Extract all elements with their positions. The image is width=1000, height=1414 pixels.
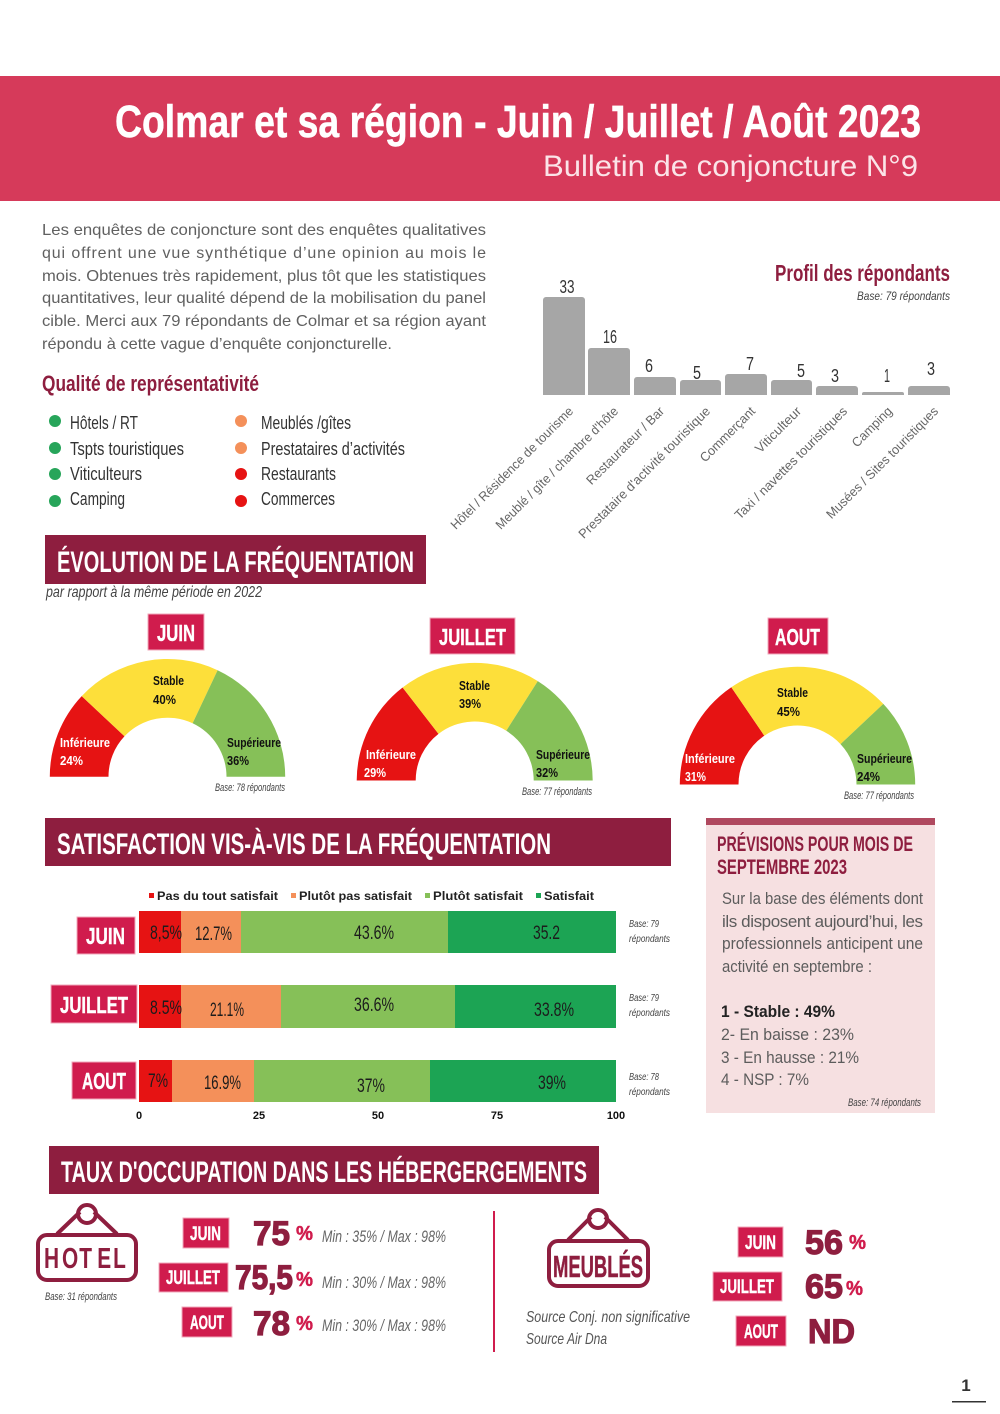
stacked bar: juin: 8,5%: [150, 923, 182, 944]
text: prévisions: ils disposent aujourd’hui, les: [722, 912, 923, 931]
legend: représentativité: Restaurants: [261, 464, 336, 484]
gauge: juillet: Stable: [459, 678, 490, 693]
section heading: taux d'occupation: TAUX D'OCCUPATION DANS LES HÉBERGERGEMENTS: [61, 1155, 587, 1189]
bar chart: profil des répondants: Restaurateur / Bar: [583, 403, 668, 488]
bar chart: profil des répondants: Viticulteur: [752, 403, 805, 456]
occupation row: hotel juillet: JUILLET: [166, 1268, 220, 1289]
occupation row: meublés juillet: %: [846, 1278, 863, 1300]
occupation row: hotel juin: [183, 1215, 446, 1253]
bar chart: profil des répondants: 7: [746, 354, 754, 374]
bar chart: profil des répondants: [447, 277, 950, 541]
stacked bar: aout: 16.9%: [204, 1073, 241, 1094]
gauge: juillet: 32%: [536, 765, 558, 780]
intro text block: mois. Obtenues très rapidement, plus tôt que les statistiques: [42, 268, 486, 285]
stacked bar: juin: répondants: [629, 934, 670, 945]
axis: satisfaction: 0: [136, 1110, 142, 1122]
occupation row: meublés aout: AOUT: [744, 1322, 778, 1343]
bar chart: profil des répondants: Taxi / navettes touristiques: [731, 403, 850, 522]
gauge: aout: 31%: [685, 769, 706, 784]
text: prévisions: 2- En baisse : 23%: [721, 1025, 854, 1044]
text: prévisions: professionnels anticipent une: [722, 934, 923, 953]
gauge: aout: Stable: [777, 685, 808, 700]
bar chart: profil des répondants: Commerçant: [697, 403, 758, 465]
bar chart: profil des répondants: 3: [927, 359, 935, 379]
gauge: juin: 24%: [60, 753, 83, 768]
section heading: évolution de la fréquentation: [45, 535, 426, 584]
bar chart: profil des répondants: Meublé / gîte / chambre d'hôte: [492, 404, 621, 532]
stacked bar: juin: 35.2: [533, 923, 560, 944]
occupation row: meublés juin: [738, 1224, 866, 1262]
text: prévisions: activité en septembre :: [722, 957, 872, 976]
gauge: juin: 36%: [227, 753, 249, 768]
stacked bar: juillet: 8.5%: [150, 998, 182, 1019]
text: prévisions: 3 - En hausse : 21%: [721, 1048, 859, 1067]
stacked bar: juin: 43.6%: [354, 923, 394, 944]
section heading: satisfaction: [45, 818, 671, 866]
source note: Source Air Dna: [526, 1331, 607, 1348]
legend: satisfaction: Satisfait: [544, 889, 594, 903]
occupation row: hotel aout: AOUT: [190, 1313, 224, 1334]
stacked bar: juillet: 33.8%: [534, 1000, 574, 1021]
occupation row: meublés juin: 56: [805, 1224, 843, 1262]
axis: satisfaction: 25: [253, 1110, 265, 1122]
gauge: aout: 45%: [777, 704, 800, 719]
legend: représentativité: Camping: [70, 489, 125, 509]
occupation row: hotel juin: 75: [253, 1215, 290, 1253]
icon: meublés sign: MEUBLÉS: [553, 1249, 643, 1284]
occupation row: hotel aout: %: [296, 1313, 313, 1335]
stacked bar: aout: 7%: [148, 1071, 168, 1092]
source note: [526, 1309, 690, 1348]
gauge: aout: [680, 618, 915, 802]
base: prévisions: Base: 74 répondants: [848, 1097, 921, 1109]
occupation row: meublés juillet: 65: [805, 1268, 843, 1306]
gauge: juin: Stable: [153, 673, 184, 688]
occupation row: hotel juin: Min : 35% / Max : 98%: [322, 1227, 446, 1246]
gauge: juillet: [357, 618, 593, 798]
heading: prévisions: PRÉVISIONS POUR MOIS DE: [717, 833, 913, 856]
gauge: juillet: Base: 77 répondants: [522, 786, 592, 798]
occupation row: hotel aout: Min : 30% / Max : 98%: [322, 1316, 446, 1335]
occupation row: meublés aout: [736, 1313, 855, 1351]
stacked bar: juillet: Base: 79: [629, 993, 659, 1004]
intro text block: Les enquêtes de conjoncture sont des enquêtes qualitatives: [42, 222, 486, 239]
occupation row: hotel aout: [182, 1305, 446, 1343]
intro text block: [42, 222, 487, 353]
occupation row: hotel juillet: %: [296, 1269, 313, 1291]
bar chart: profil des répondants: 5: [693, 363, 701, 383]
occupation row: hotel juillet: 75,5: [235, 1259, 293, 1297]
section heading: taux d'occupation: [49, 1146, 599, 1194]
stacked bar: aout: répondants: [629, 1087, 670, 1098]
gauge: aout: Supérieure: [857, 751, 912, 766]
gauge: juillet: 29%: [364, 765, 386, 780]
bar chart: profil des répondants: 1: [884, 366, 890, 386]
page number: 1: [961, 1376, 971, 1395]
gauge: juillet: Inférieure: [366, 747, 416, 762]
stacked bar: juin: JUIN: [86, 923, 125, 949]
legend: représentativité: [49, 413, 405, 509]
stacked bar: juillet: répondants: [629, 1008, 670, 1019]
gauge: aout: Inférieure: [685, 751, 735, 766]
text: prévisions: Sur la base des éléments dont: [722, 889, 923, 908]
intro text block: cible. Merci aux 79 répondants de Colmar et sa région ayant: [42, 313, 487, 330]
subheading: période: par rapport à la même période en 2022: [45, 584, 262, 601]
occupation row: meublés aout: ND: [808, 1313, 855, 1351]
occupation row: hotel juillet: [159, 1259, 446, 1297]
intro text block: qui offrent une vue synthétique d’une opinion au mois le: [42, 245, 486, 262]
text: prévisions: 4 - NSP : 7%: [721, 1070, 809, 1089]
stacked bar: juillet: 36.6%: [354, 995, 394, 1016]
stacked bar: juillet: 21.1%: [210, 1000, 244, 1021]
text: prévisions: 1 - Stable : 49%: [721, 1002, 835, 1021]
bar chart: profil des répondants: 6: [645, 356, 653, 376]
stacked bar: juillet: [51, 985, 670, 1028]
legend: satisfaction: [149, 889, 594, 903]
bar chart: profil des répondants: 3: [831, 366, 839, 386]
bar chart: profil des répondants: Musées / Sites touristiques: [823, 403, 941, 522]
text: prévisions: [721, 889, 923, 1089]
icon: hotel sign: HOTEL: [44, 1243, 126, 1275]
stacked bar: juillet: JUILLET: [60, 992, 128, 1018]
gauge: juin: Base: 78 répondants: [215, 782, 285, 794]
occupation row: meublés juin: JUIN: [745, 1233, 776, 1254]
stacked bar: aout: Base: 78: [629, 1072, 659, 1083]
intro text block: répondu à cette vague d’enquête conjoncturelle.: [42, 336, 392, 353]
icon: hotel sign: [38, 1205, 136, 1280]
occupation row: hotel juin: JUIN: [190, 1224, 221, 1245]
occupation row: meublés juillet: [713, 1268, 863, 1306]
legend: satisfaction: Pas du tout satisfait: [157, 889, 278, 903]
occupation row: meublés juillet: JUILLET: [720, 1277, 774, 1298]
icon: meublés sign: [549, 1210, 648, 1286]
header band: [0, 76, 1000, 201]
gauge: juin: 40%: [153, 692, 176, 707]
section heading: évolution de la fréquentation: ÉVOLUTION DE LA FRÉQUENTATION: [57, 545, 414, 579]
legend: satisfaction: Plutôt pas satisfait: [299, 889, 412, 903]
occupation row: hotel juin: %: [296, 1223, 313, 1245]
section heading: satisfaction: SATISFACTION VIS-À-VIS DE LA FRÉQUENTATION: [57, 827, 551, 861]
bar chart: profil des répondants: Prestataire d'activité touristique: [575, 404, 713, 541]
axis: satisfaction: 50: [372, 1110, 384, 1122]
gauge: aout: 24%: [857, 769, 880, 784]
bar chart: profil des répondants: 16: [603, 327, 617, 347]
source note: Source Conj. non significative: [526, 1309, 690, 1326]
heading: prévisions: [717, 833, 913, 879]
legend: représentativité: Hôtels / RT: [70, 413, 138, 433]
stacked bar: aout: 39%: [538, 1073, 566, 1094]
legend: satisfaction: Plutôt satisfait: [433, 889, 523, 903]
subtitle: Bulletin de conjoncture N°9: [543, 150, 918, 183]
gauge: juillet: 39%: [459, 696, 481, 711]
legend: représentativité: Viticulteurs: [70, 464, 142, 484]
intro text block: quantitatives, leur qualité dépend de la mobilisation du panel: [42, 290, 486, 307]
heading: prévisions: SEPTEMBRE 2023: [717, 856, 847, 879]
gauge: juillet: JUILLET: [439, 624, 506, 650]
gauge: juin: Inférieure: [60, 735, 110, 750]
base: hotel: Base: 31 répondants: [45, 1291, 117, 1303]
bar chart: profil des répondants: 33: [560, 277, 574, 297]
occupation row: hotel juillet: Min : 30% / Max : 98%: [322, 1273, 446, 1292]
gauge: aout: AOUT: [775, 624, 820, 650]
legend: représentativité: Tspts touristiques: [70, 439, 184, 459]
legend: représentativité: Meublés /gîtes: [261, 413, 351, 433]
gauge: juillet: Supérieure: [536, 747, 590, 762]
stacked bar: juin: Base: 79: [629, 919, 659, 930]
gauge: juin: JUIN: [157, 620, 195, 646]
legend: représentativité: Commerces: [261, 489, 335, 509]
stacked bar: juin: 12.7%: [195, 924, 232, 945]
occupation row: meublés juin: %: [849, 1232, 866, 1254]
stacked bar: aout: AOUT: [82, 1068, 126, 1094]
axis: satisfaction: [136, 1110, 625, 1122]
stacked bar: aout: 37%: [357, 1076, 385, 1097]
stacked bar: aout: [72, 1060, 670, 1102]
legend: représentativité: Prestataires d’activités: [261, 439, 405, 459]
page number: [952, 1376, 986, 1402]
axis: satisfaction: 75: [491, 1110, 503, 1122]
gauge: aout: Base: 77 répondants: [844, 790, 914, 802]
gauge: juin: [50, 614, 285, 794]
gauge: juin: Supérieure: [227, 735, 281, 750]
heading: qualité de représentativité: Qualité de représentativité: [42, 371, 259, 396]
panel: prévisions septembre: [706, 818, 935, 1113]
base: profil: Base: 79 répondants: [857, 289, 950, 303]
bar chart: profil des répondants: Hôtel / Résidence de tourisme: [447, 404, 576, 532]
axis: satisfaction: 100: [607, 1110, 625, 1122]
stacked bar: juin: [77, 911, 670, 954]
occupation row: hotel aout: 78: [253, 1305, 290, 1343]
bar chart: profil des répondants: Camping: [848, 404, 895, 450]
bar chart: profil des répondants: 5: [797, 361, 805, 381]
